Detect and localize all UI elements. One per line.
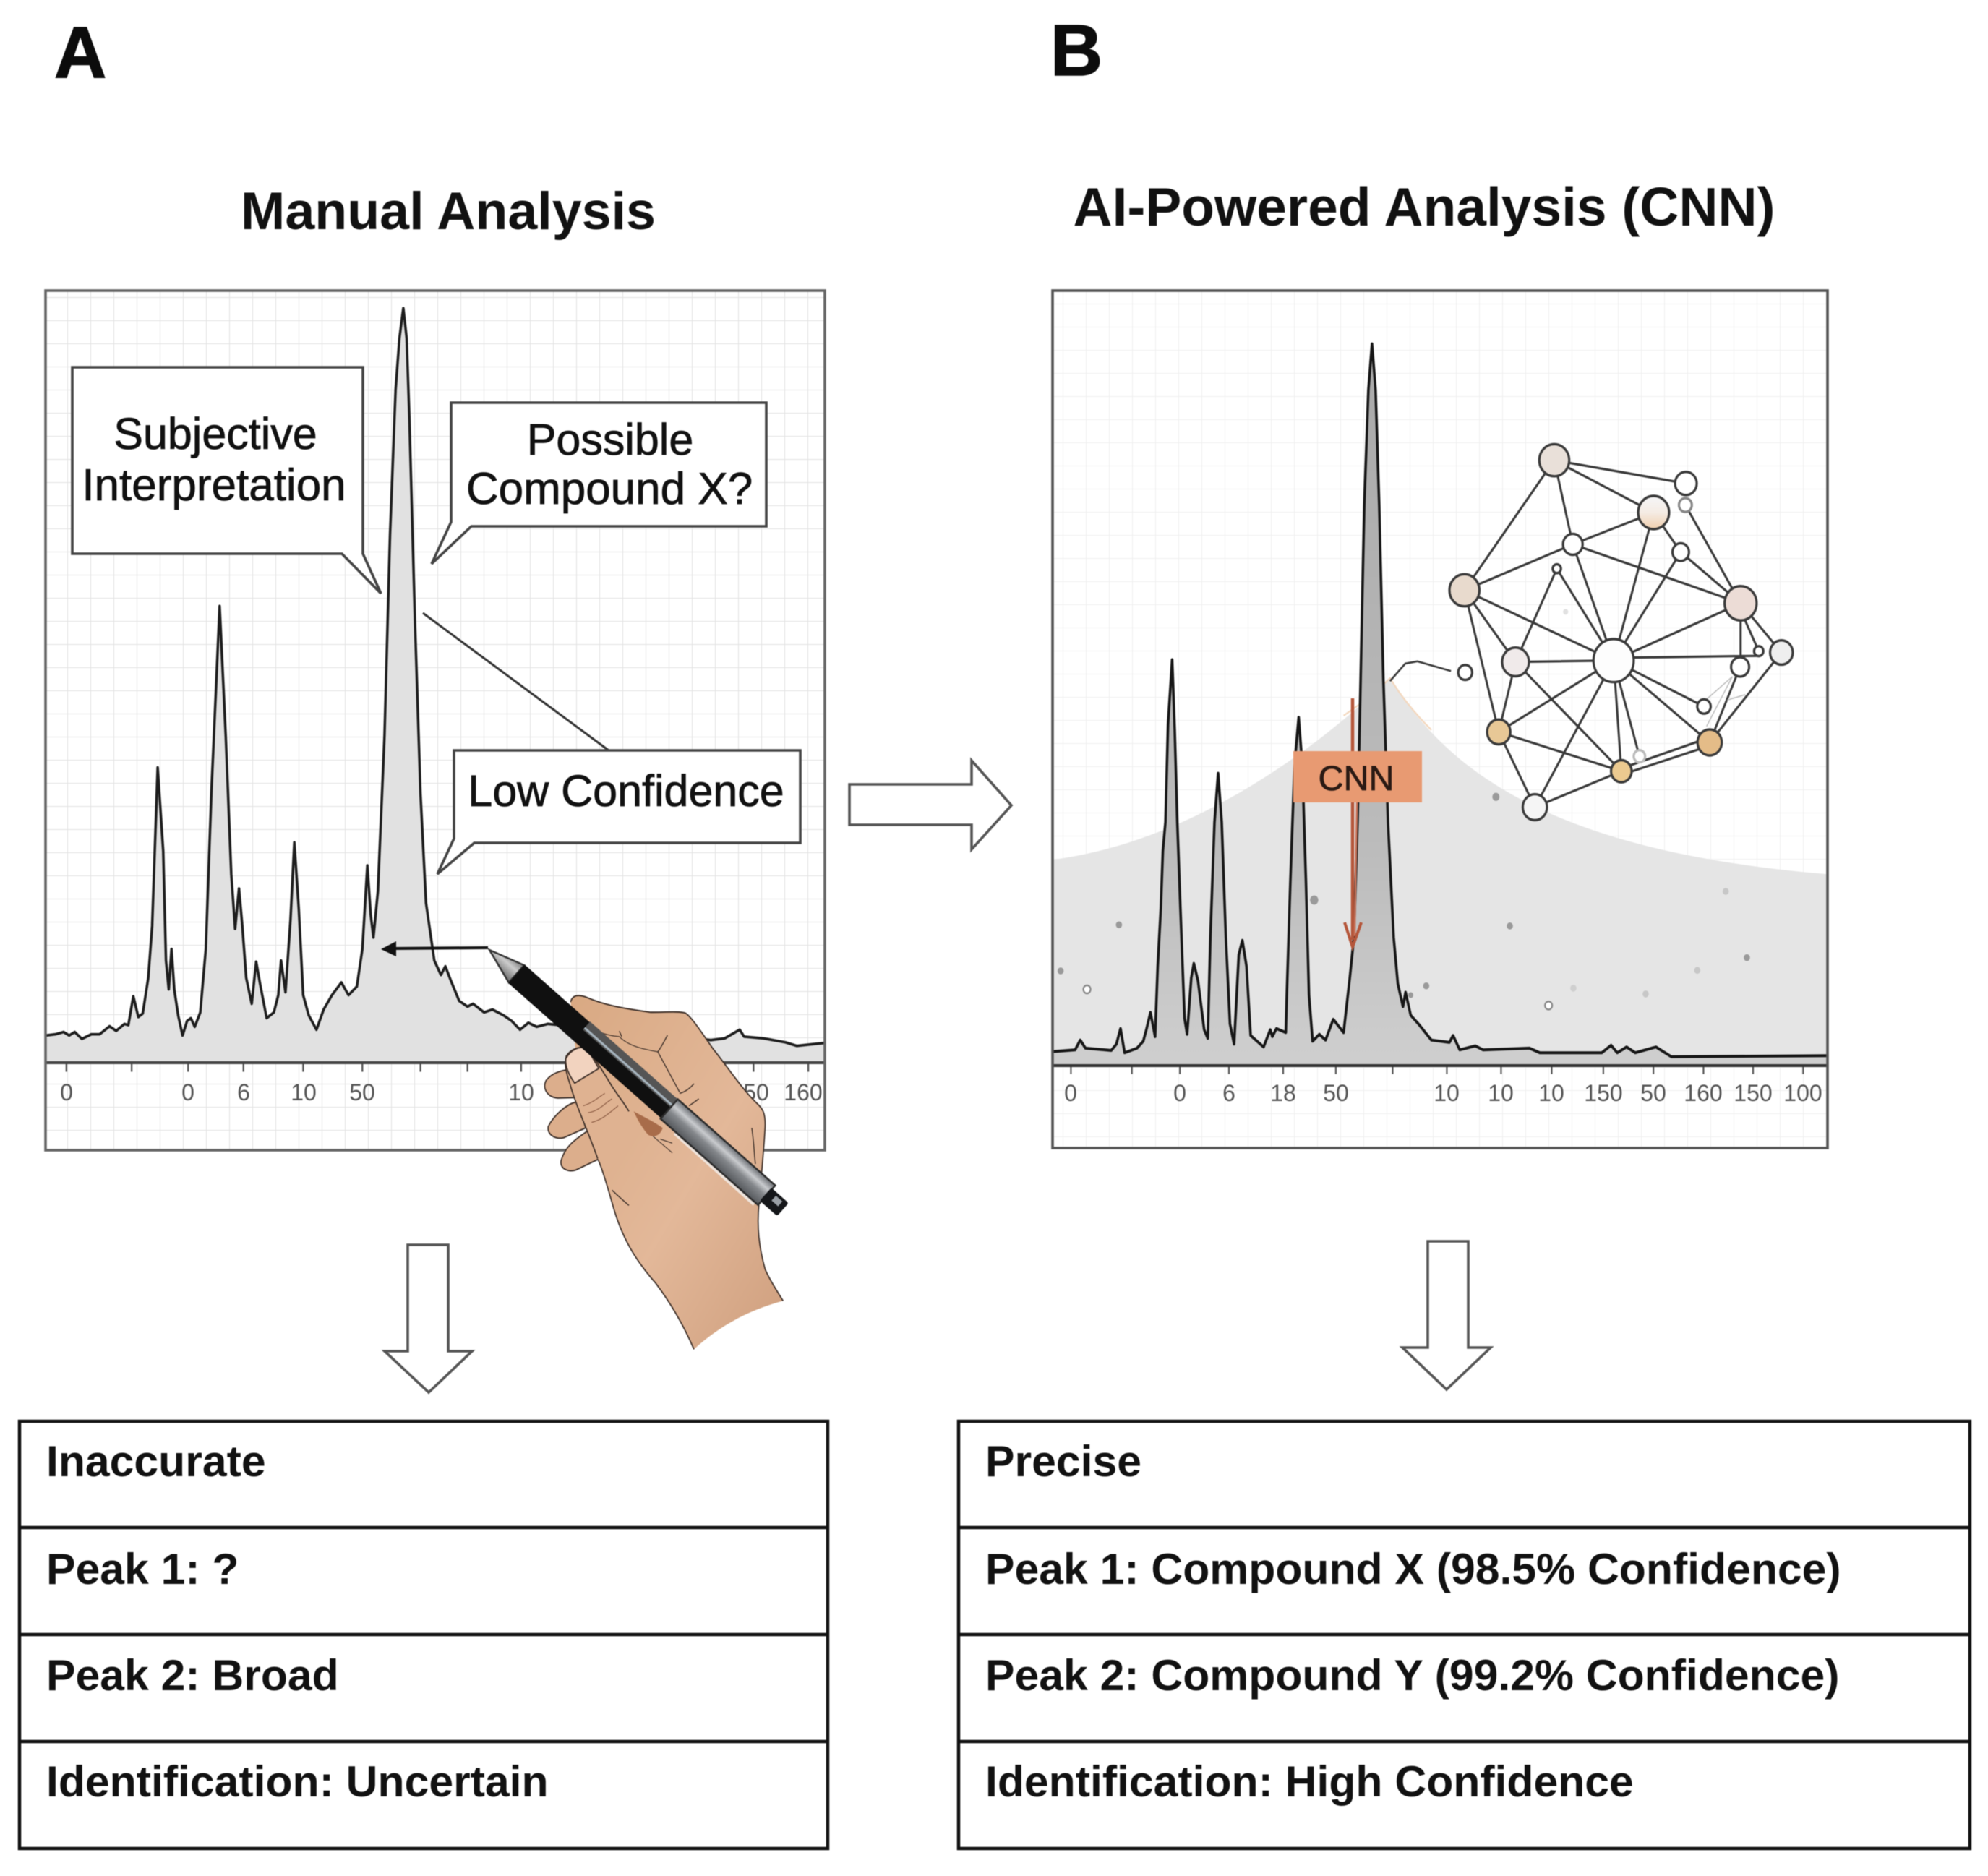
label: CNN xyxy=(1293,751,1422,802)
spectrum: AI xyxy=(1053,344,1826,1074)
axis labels: AI: 100 xyxy=(1783,1080,1822,1106)
row text: AI xyxy=(985,1436,1841,1806)
axis labels: AI: 0 xyxy=(1064,1080,1077,1106)
row text: AI: Identification: High Confidence xyxy=(985,1757,1634,1806)
x axis: manual xyxy=(46,1061,825,1064)
callout: Possible Compound X?: Possible xyxy=(527,415,693,464)
x axis: AI xyxy=(1053,1064,1828,1067)
callout: Possible Compound X? xyxy=(432,403,766,564)
callout: Possible Compound X?: Compound X? xyxy=(466,464,753,514)
row text: AI: Peak 1: Compound X (98.5% Confidence) xyxy=(985,1544,1841,1593)
axis labels: manual: 0 xyxy=(60,1079,73,1105)
highlight under pen barrel xyxy=(674,1133,754,1204)
row text: manual: Peak 2: Broad xyxy=(46,1650,339,1700)
network connections xyxy=(1390,461,1781,808)
callout: Low Confidence xyxy=(437,750,800,874)
heading: AI-Powered Analysis (CNN): AI-Powered Analysis (CNN) xyxy=(1074,176,1775,237)
arrow: pen to peak xyxy=(381,941,488,956)
heading: Manual Analysis: Manual Analysis xyxy=(241,181,656,241)
network nodes xyxy=(1449,444,1793,821)
axis labels: manual: 6 xyxy=(237,1079,250,1105)
axis labels: manual: 50 xyxy=(743,1079,769,1105)
row text: manual: Peak 1: ? xyxy=(46,1544,239,1593)
row text: manual: Identification: Uncertain xyxy=(46,1757,549,1806)
illustration: hand holding pen xyxy=(481,941,792,1349)
shadow between thumb and pen xyxy=(634,1111,663,1136)
specks in grey area xyxy=(1058,609,1750,1009)
spectrum: manual xyxy=(46,308,824,1072)
neural network diagram xyxy=(1390,444,1793,821)
thumb xyxy=(565,1048,641,1172)
leader line to Low Confidence xyxy=(423,613,609,750)
callout: Low Confidence: Low Confidence xyxy=(468,766,784,815)
axis labels: manual: 160 xyxy=(784,1079,823,1105)
knuckle creases xyxy=(612,1031,755,1205)
panel frame xyxy=(1053,291,1828,1148)
arrow: manual to AI xyxy=(849,761,1011,849)
panel letter B: B xyxy=(1050,10,1102,91)
row text: manual: Inaccurate xyxy=(46,1436,266,1486)
callout: Subjective Interpretation: Subjective xyxy=(113,409,317,458)
label: CNN: CNN xyxy=(1318,759,1394,798)
panel: AI analysis chart xyxy=(1053,291,1828,1148)
row text: manual xyxy=(46,1436,549,1806)
axis labels: AI: 18 xyxy=(1270,1080,1296,1106)
axis labels: AI: 160 xyxy=(1684,1080,1723,1106)
axis labels: AI: 150 xyxy=(1584,1080,1623,1106)
hand xyxy=(545,995,783,1349)
hand outer outline xyxy=(570,995,783,1301)
axis labels: AI: 0 xyxy=(1173,1080,1186,1106)
panel letter A: A xyxy=(54,12,106,93)
axis labels: manual: 0 xyxy=(181,1079,194,1105)
axis labels: AI: 50 xyxy=(1640,1080,1666,1106)
panel: manual analysis chart xyxy=(46,291,825,1150)
pen xyxy=(481,941,792,1220)
lower fingers xyxy=(545,1070,578,1098)
palm and wrist fill xyxy=(570,995,783,1349)
arrow: CNN red xyxy=(1345,698,1361,947)
axis labels: AI xyxy=(1064,1080,1822,1106)
axis labels: AI: 10 xyxy=(1488,1080,1514,1106)
row text: AI: Precise xyxy=(985,1436,1141,1486)
axis labels: manual xyxy=(60,1079,823,1105)
grey background hump xyxy=(1053,678,1826,1066)
axis labels: manual: 10 xyxy=(508,1079,534,1105)
callout: Subjective Interpretation: Interpretation xyxy=(82,461,346,510)
axis labels: AI: 50 xyxy=(1323,1080,1349,1106)
arrow: AI to results xyxy=(1402,1241,1491,1389)
axis labels: manual: 50 xyxy=(349,1079,375,1105)
callout: Subjective Interpretation xyxy=(72,367,381,594)
table: AI results xyxy=(959,1421,1970,1849)
row text: AI: Peak 2: Compound Y (99.2% Confidence) xyxy=(985,1650,1839,1700)
axis labels: AI: 150 xyxy=(1734,1080,1773,1106)
arrow: manual to results xyxy=(385,1245,472,1392)
axis labels: manual: 10 xyxy=(291,1079,317,1105)
table: manual results xyxy=(20,1421,828,1849)
panel frame xyxy=(46,291,825,1150)
axis labels: AI: 10 xyxy=(1434,1080,1460,1106)
axis labels: AI: 10 xyxy=(1538,1080,1564,1106)
axis labels: AI: 6 xyxy=(1222,1080,1235,1106)
